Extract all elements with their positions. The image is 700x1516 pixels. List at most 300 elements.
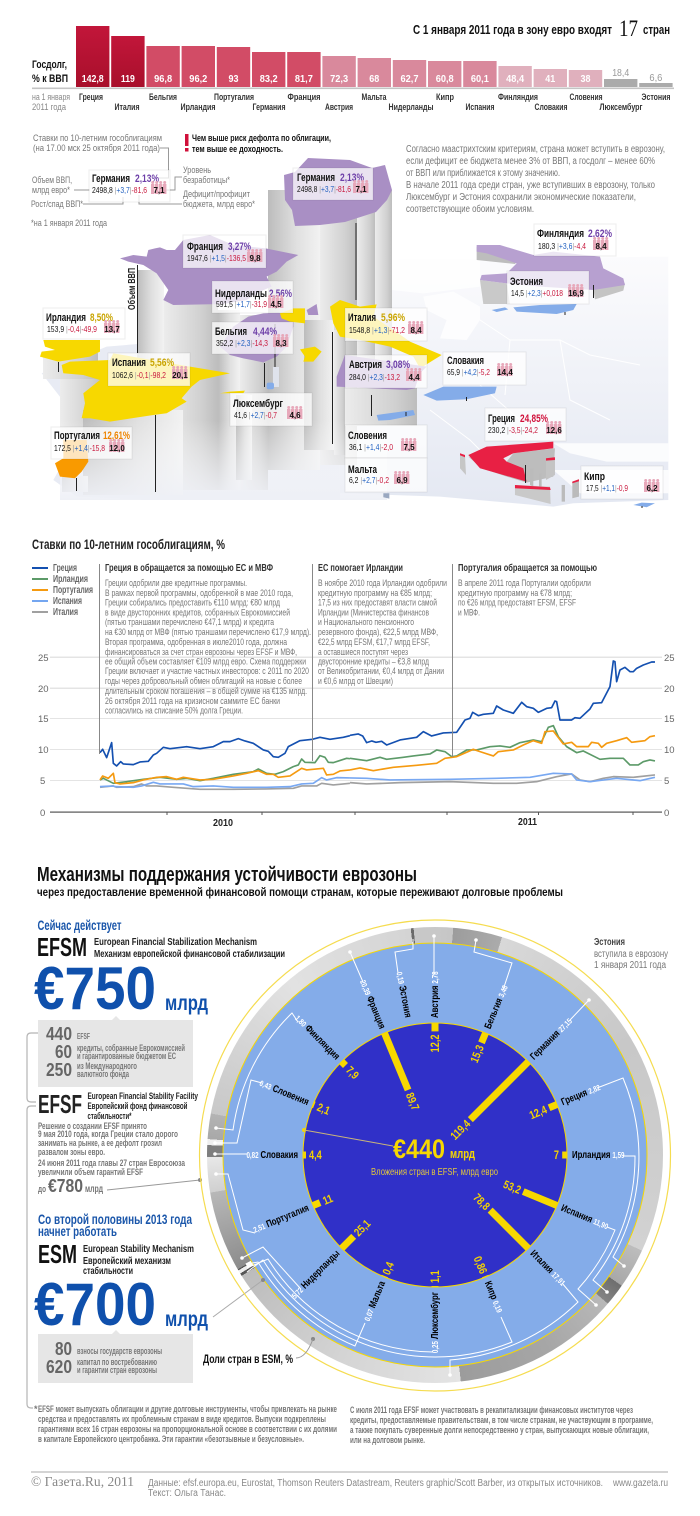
radial yellow bars: investments in EFSF: 7,9 xyxy=(343,1065,361,1082)
annotation: EU helps Ireland: двусторонние кредиты – €3,8 млрд xyxy=(318,656,430,666)
legend: how to read the labels: Рост/спад ВВП* xyxy=(31,199,83,209)
text block: Maastricht criteria: Люксембург и Эстония сохранили экономические показатели, xyxy=(406,191,636,203)
label: Slovenia: 7,5 xyxy=(403,443,415,452)
label: Cyprus: 6,2 xyxy=(646,484,658,493)
block: EFSF: увеличили объем гарантий EFSF xyxy=(38,1167,143,1177)
bar chart: government debt: 83,2 xyxy=(260,73,278,85)
label: Slovenia: 36,1 |+1,4|-2,0 xyxy=(349,442,393,452)
bar chart: government debt: 6,6 xyxy=(649,72,663,84)
radial yellow bars: investments in EFSF: 89,7 xyxy=(403,1091,421,1113)
legend: how to read the labels: Германия xyxy=(92,173,130,185)
radial yellow bars: investments in EFSF: 15,3 xyxy=(469,1044,487,1065)
label: Spain: 5,56% xyxy=(150,357,174,369)
label: Netherlands xyxy=(212,281,293,313)
center total: €440 billion: Вложения стран в EFSF, млрд евро xyxy=(371,1166,498,1178)
line chart: 10-year bond yields: 15 xyxy=(38,714,49,725)
legend: yield chart: Ирландия xyxy=(53,574,88,585)
block: EFSM: млрд xyxy=(165,992,208,1015)
label: Spain: Испания xyxy=(112,357,146,369)
bar chart: government debt: 60,1 xyxy=(471,73,489,85)
block: ESM: €700 xyxy=(34,1271,156,1338)
legend: yield chart: Италия xyxy=(53,607,78,618)
country labels around the inner circle: 0,82 Словакия xyxy=(246,1149,298,1160)
label: Slovakia: 14,4 xyxy=(497,368,513,377)
label: Malta: 6,9 xyxy=(396,476,408,485)
title: eurozone 17 countries xyxy=(413,16,670,41)
bar chart: government debt: 62,7 xyxy=(400,73,419,85)
radial yellow bars: investments in EFSF: 78,8 xyxy=(470,1192,492,1213)
label: Slovenia xyxy=(345,425,427,458)
legend: how to read the labels: безработицы* xyxy=(183,175,230,185)
bar chart: government debt: 142,8 xyxy=(82,73,104,85)
bar chart: government debt: 60,8 xyxy=(436,73,454,85)
label: Netherlands: 2,56% xyxy=(269,288,292,300)
block: EFSM: и гарантированные бюджетом ЕС xyxy=(77,1051,176,1061)
callout: default risk note: Чем выше риск дефолта по облигации, xyxy=(192,133,331,144)
bar chart: government debt: 18,4 xyxy=(612,67,629,79)
label: Belgium: 352,2 |+2,3|-14,3 xyxy=(216,338,268,348)
bar chart: government debt: Нидерланды xyxy=(388,102,434,112)
annotation: Portugal asks for help: кредитную программу на €78 млрд; xyxy=(458,588,572,598)
footnote: EFSF right xyxy=(350,1405,653,1445)
annotation: Greece asks for help: ее общий объем составляет €109 млрд евро. Схема поддержки xyxy=(105,656,306,666)
line chart: 10-year bond yields: 2011 xyxy=(518,816,537,828)
block: ESM xyxy=(34,1211,263,1383)
legend: yield chart xyxy=(32,563,93,618)
block: EFSF: развалом зоны евро. xyxy=(38,1147,105,1157)
annotation: EU helps Ireland: резервного фонда), €22,5 млрд МВФ, xyxy=(318,627,438,637)
bar chart: government debt: 93 xyxy=(228,73,239,85)
label: Austria xyxy=(345,355,427,388)
label: Greece: 230,2 |-3,5|-24,2 xyxy=(488,425,538,435)
radial yellow bars: investments in EFSF: 11 xyxy=(321,1193,335,1208)
bar chart: government debt: Финляндия xyxy=(498,92,538,102)
label: Germany: Германия xyxy=(297,172,335,184)
note: Estonia: Эстония xyxy=(594,937,625,948)
country labels around the inner circle: 20,39 Франция xyxy=(358,978,388,1030)
label: Luxembourg xyxy=(230,393,312,426)
block: ESM: и гарантии стран еврозоны xyxy=(77,1365,157,1375)
block: EFSF: 9 мая 2010 года, когда Греции стало дорого xyxy=(38,1129,178,1139)
radial yellow bars: investments in EFSF: 25,1 xyxy=(352,1218,374,1239)
label: Cyprus: Кипр xyxy=(584,471,605,483)
bracket lines xyxy=(27,1033,38,1408)
note: Estonia xyxy=(594,937,668,971)
country labels around the inner circle: 0,25 Люксембург xyxy=(429,1292,440,1353)
annotation: Greece asks for help: Греции включает и участие частных инвесторов: с 2011 по 2020 xyxy=(105,666,309,676)
label: Italy: 5,96% xyxy=(381,312,405,324)
label: Portugal: Португалия xyxy=(54,430,100,442)
text block: Maastricht criteria: соответствующие обоим условиям. xyxy=(406,203,534,215)
country labels around the inner circle: 1,80 Финляндия xyxy=(293,1012,342,1062)
line chart: 10-year bond yields: 25 xyxy=(38,653,49,664)
annotation: Portugal asks for help: и МВФ. xyxy=(458,608,480,618)
bar chart: government debt xyxy=(32,26,674,112)
label: Germany: 7,1 xyxy=(355,185,367,194)
country labels around the inner circle: Испания 11,90 xyxy=(560,1202,610,1231)
footnote: EFSF left xyxy=(34,1404,337,1444)
annotation: Greece asks for help: Греции собирались предоставить €110 млрд: €80 млрд xyxy=(105,598,281,608)
block: EFSM: 250 xyxy=(46,1060,72,1080)
label: Italy xyxy=(345,308,427,341)
annotation: Greece asks for help: финансироваться за счет стран еврозоны через EFSF и МВФ, xyxy=(105,647,297,657)
label: France: 3,27% xyxy=(228,241,251,253)
radial yellow bars: investments in EFSF: 2,1 xyxy=(315,1102,331,1118)
label: Italy: 8,4 xyxy=(410,326,422,335)
axis title: GDP volume: Объем ВВП xyxy=(126,268,138,310)
label: Portugal: 172,5 |+1,4|-15,8 xyxy=(54,443,105,453)
block: ESM: ESM xyxy=(38,1239,77,1269)
country labels around the inner circle xyxy=(246,971,625,1353)
block: ESM: Со второй половины 2013 года xyxy=(38,1211,192,1227)
bar chart: government debt: на 1 января xyxy=(32,92,70,102)
bar chart: government debt: Кипр xyxy=(436,92,454,102)
label: Germany: 2498,8 |+3,7|-81,6 xyxy=(297,184,351,194)
legend: how to read the labels: Уровень xyxy=(183,165,211,175)
radial yellow bars: investments in EFSF: 1,1 xyxy=(430,1270,442,1283)
bar chart: government debt: Италия xyxy=(114,102,140,112)
title: eurozone 17 countries: С 1 января 2011 года в зону евро входят xyxy=(413,22,612,37)
line chart: 10-year bond yields: 0 xyxy=(664,808,669,819)
legend: how to read the labels: 2498,8 |+3,7|-81,6 xyxy=(92,185,147,195)
annotation: Greece asks for help: годы через добровольный обмен облигаций на новые с более xyxy=(105,676,302,686)
label: France: 1947,6 |+1,5|-136,5 xyxy=(187,253,246,263)
block: EFSF: 24 июня 2011 года главы 27 стран Евросоюза xyxy=(38,1158,186,1168)
legend: how to read the labels: Объем ВВП, xyxy=(32,175,72,185)
label: Slovakia: 65,9 |+4,2|-5,2 xyxy=(447,367,490,377)
annotation: Greece asks for help: Греции одобрили две кредитные программы. xyxy=(105,578,247,588)
legend: how to read the labels xyxy=(31,133,255,228)
bar chart: government debt: 2011 года xyxy=(32,102,66,112)
annotation: EU helps Ireland: ЕС помогает Ирландии xyxy=(318,563,403,574)
line chart: 10-year bond yields: 5 xyxy=(664,776,669,787)
label: Finland: 8,4 xyxy=(595,242,607,251)
heading: stability mechanisms: через предоставление временной финансовой помощи странам, которые переживают долговые проблемы xyxy=(37,885,563,899)
annotation: EU helps Ireland: 17,5 из них предоставят власти самой xyxy=(318,598,437,608)
radial yellow bars: investments in EFSF: 53,2 xyxy=(501,1179,522,1197)
footer xyxy=(31,1472,668,1499)
country labels around the inner circle: Греция 2,82 xyxy=(559,1081,602,1107)
label: Italy: 1548,8 |+1,3|-71,2 xyxy=(349,325,405,335)
bar chart: government debt: Словакия xyxy=(534,102,568,112)
line chart: 10-year bond yields: 0 xyxy=(40,808,45,819)
bar chart: government debt: 81,7 xyxy=(295,73,313,85)
annotation: EU helps Ireland xyxy=(318,563,447,686)
bar chart: government debt: 96,8 xyxy=(154,73,172,85)
footer: Текст: Ольга Танас. xyxy=(148,1488,226,1499)
radial yellow bars: investments in EFSF: 12,4 xyxy=(528,1104,549,1122)
block: EFSF: стабильности* xyxy=(88,1111,132,1122)
footnote: EFSF left: гарантиями всех 16 стран еврозоны на пропорциональной основе в соответствии с их долями xyxy=(38,1424,337,1434)
line chart: 10-year bond yields: 15 xyxy=(664,714,675,725)
label: Slovakia: Словакия xyxy=(447,355,484,367)
heading: stability mechanisms xyxy=(37,864,563,899)
annotation: Greece asks for help: Вторая программа, одобренная в июле2010 года, должна xyxy=(105,637,287,647)
annotation: Greece asks for help: В рамках первой программы, одобренной в мае 2010 года, xyxy=(105,588,293,598)
footnote: EFSF left: * xyxy=(34,1404,38,1414)
annotation: EU helps Ireland: и Национального пенсионного xyxy=(318,617,414,627)
country labels around the inner circle: Италия 17,91 xyxy=(528,1248,568,1288)
label: France xyxy=(183,235,266,268)
annotation: Greece asks for help xyxy=(105,562,311,716)
line chart: 10-year bond yields: 20 xyxy=(664,684,675,695)
block: EFSM: EFSF xyxy=(77,1032,90,1041)
legend: how to read the labels: 2,13% xyxy=(135,173,159,185)
label: Ireland: Ирландия xyxy=(46,312,86,324)
label: Slovakia xyxy=(443,352,526,385)
label: Cyprus xyxy=(581,466,663,499)
label: Estonia: Эстония xyxy=(510,276,543,288)
annotation: Greece asks for help: (пятью траншами перечислено €47,1 млрд) и кредита xyxy=(105,617,274,627)
bar chart: government debt: Словения xyxy=(570,92,602,102)
block: EFSF: €780 xyxy=(48,1176,83,1196)
label: Estonia: 14,5 |+2,3|+0,018 xyxy=(511,288,563,298)
countries on the map xyxy=(40,158,655,507)
country labels around the inner circle: Ирландия 1,59 xyxy=(572,1149,625,1160)
chart: circular diagram xyxy=(200,920,670,1391)
country labels around the inner circle: 0,19 Эстония xyxy=(394,971,414,1019)
footnote: EFSF right: или на долговом рынке. xyxy=(350,1435,425,1445)
annotation: Greece asks for help: Греция в обращается за помощью ЕС и МВФ xyxy=(105,562,273,574)
callout: default risk note xyxy=(185,133,331,155)
block: EFSM xyxy=(34,917,285,1087)
block: EFSM: кредиты, собранные Еврокомиссией xyxy=(77,1043,185,1053)
footnote: EFSF left: EFSF может выпускать облигации и другие долговые инструменты, чтобы привлекать на рынке xyxy=(38,1404,337,1414)
block: EFSF: до xyxy=(38,1184,46,1194)
bar chart: government debt: 41 xyxy=(545,73,555,85)
label: Belgium: 8,3 xyxy=(275,339,287,348)
bar chart: government debt: Германия xyxy=(252,102,286,112)
annotation: EU helps Ireland: Ирландии (Министерства финансов xyxy=(318,608,429,618)
label: Spain: 20,1 xyxy=(172,371,188,380)
block: EFSF: Решение о создании EFSF принято xyxy=(38,1121,147,1131)
legend: how to read the labels: бюджета, млрд евро* xyxy=(183,199,255,209)
title: eurozone 17 countries: стран xyxy=(643,22,670,37)
block: EFSM: Механизм европейской финансовой стабилизации xyxy=(94,948,285,960)
bar chart: government debt: 72,3 xyxy=(330,73,348,85)
block: EFSM: 440 xyxy=(46,1024,72,1044)
annotation: Greece asks for help: согласились на списание 50% долга Греции. xyxy=(105,706,243,716)
annotation: Portugal asks for help: по €26 млрд предоставят EFSM, EFSF xyxy=(458,598,576,608)
label: Ireland xyxy=(43,308,125,339)
line chart: 10-year bond yields: 10 xyxy=(38,745,49,756)
radial yellow bars: investments in EFSF: 7 xyxy=(554,1150,559,1162)
text block: Maastricht criteria xyxy=(406,144,665,215)
country labels around the inner circle: 0,43 Словения xyxy=(258,1077,311,1107)
label: Luxembourg: 4,6 xyxy=(289,411,301,420)
block: EFSF: EFSF xyxy=(38,1089,82,1119)
bar chart: government debt: Эстония xyxy=(642,92,670,102)
label: Italy: Италия xyxy=(348,312,376,324)
label: Ireland: 8,50% xyxy=(90,312,113,324)
bar chart: government debt: Мальта xyxy=(362,92,387,102)
label: Netherlands: Нидерланды xyxy=(215,288,267,300)
callout: shares in ESM: Доли стран в ESM, % xyxy=(203,1354,293,1366)
line chart: 10-year bond yields: 20 xyxy=(38,684,49,695)
label: Greece: 12,6 xyxy=(546,426,562,435)
radial yellow bars: investments in EFSF xyxy=(303,1023,567,1287)
label: Estonia xyxy=(507,271,589,304)
block: EFSM: European Financial Stabilization Mechanism xyxy=(94,937,257,948)
blue ring: investments labels xyxy=(213,934,647,1377)
country labels around the inner circle: Кипр 0,19 xyxy=(483,1279,506,1314)
text block: Maastricht criteria: от ВВП или приближается к этому значению. xyxy=(406,167,560,179)
annotation: EU helps Ireland: от Великобритании, €0,4 млрд от Дании xyxy=(318,666,444,676)
annotation: Portugal asks for help: В апреле 2011 года Португалии одобрили xyxy=(458,578,591,588)
label: Portugal: 12,61% xyxy=(103,430,130,442)
block: ESM: начнет работать xyxy=(38,1223,117,1239)
heading: bond yields: Ставки по 10-летним гособлигациям, % xyxy=(32,536,225,552)
annotation: Greece asks for help: 26 октября 2011 года на кризисном саммите ЕС банки xyxy=(105,696,280,706)
annotation: Portugal asks for help: Португалия обращается за помощью xyxy=(458,562,597,574)
country labels around the inner circle: Германия 27,15 xyxy=(528,1015,574,1062)
annotation: Portugal asks for help xyxy=(458,562,597,618)
line chart: 10-year bond yields: 2010 xyxy=(213,817,233,829)
label: Austria: 3,08% xyxy=(386,359,410,371)
footer: Данные: efsf.europa.eu, Eurostat, Thomson Reuters Datastream, Reuters graphic/Scott Barber, из открытых источников. xyxy=(148,1478,603,1489)
line chart: 10-year bond yields: 25 xyxy=(664,653,675,664)
annotation: EU helps Ireland: и €0,6 млрд от Швеции) xyxy=(318,676,393,686)
bar chart: government debt: 48,4 xyxy=(506,73,524,85)
label: Belgium xyxy=(212,322,293,354)
country labels around the inner circle: Австрия 2,78 xyxy=(429,971,440,1018)
label: Greece: Греция xyxy=(488,413,515,425)
bar chart: government debt: Австрия xyxy=(325,102,353,112)
label: Finland: 2,62% xyxy=(588,228,612,240)
label: Ireland: 153,9 |-0,4|-49,9 xyxy=(47,324,97,334)
legend: how to read the labels: 7,1 xyxy=(153,186,165,195)
radial yellow bars: investments in EFSF: 0,86 xyxy=(470,1255,489,1276)
label: Estonia: 16,9 xyxy=(568,289,584,298)
label: Belgium: Бельгия xyxy=(215,326,247,338)
label: Belgium: 4,44% xyxy=(253,326,277,338)
footnote: EFSF left: в капитале Европейского центробанка. Эти гарантии «безотзывные и безусловные». xyxy=(38,1434,304,1444)
block: EFSM: валютного фонда xyxy=(77,1069,130,1079)
bar chart: government debt: 119 xyxy=(121,73,135,85)
footer: www.gazeta.ru xyxy=(612,1478,668,1489)
block: EFSF: занимать на рынке, а ее дефолт грозил xyxy=(38,1138,162,1148)
label: Austria: Австрия xyxy=(349,359,382,371)
label: Slovenia: Словения xyxy=(348,430,387,442)
title: eurozone 17 countries: 17 xyxy=(619,16,638,41)
annotation: EU helps Ireland: а оставшиеся поступят через xyxy=(318,647,408,657)
legend: how to read the labels: Дефицит/профицит xyxy=(183,189,250,199)
legend: how to read the labels: *на 1 января 2011 года xyxy=(31,218,107,228)
label: Austria: 284,0 |+2,3|-13,2 xyxy=(349,372,400,382)
country labels around the inner circle: Бельгия 3,48 xyxy=(482,983,510,1030)
block: EFSM: из Международного xyxy=(77,1061,137,1071)
label: Finland: 180,3 |+3,6|-4,4 xyxy=(538,241,586,251)
center total: €440 billion: млрд xyxy=(450,1146,476,1161)
bar chart: government debt: Ирландия xyxy=(180,102,216,112)
legend: how to read the labels: Ставки по 10-летним гособлигациям xyxy=(33,133,162,143)
country labels around the inner circle: 0,07 Мальта xyxy=(361,1278,388,1323)
block: ESM: European Stability Mechanism xyxy=(83,1244,194,1255)
label: Finland xyxy=(534,224,616,256)
line chart: 10-year bond yields: 5 xyxy=(40,776,45,787)
block: EFSF: Европейский фонд финансовой xyxy=(88,1101,188,1112)
label: Greece: 24,85% xyxy=(520,413,548,425)
label: Finland: Финляндия xyxy=(537,228,584,240)
label: Malta: Мальта xyxy=(348,464,378,476)
label: Cyprus: 17,5 |+1,1|-0,9 xyxy=(586,483,628,493)
radial yellow bars: investments in EFSF: 4,4 xyxy=(309,1150,322,1162)
label: Malta xyxy=(345,458,427,492)
line chart: 10-year bond yields xyxy=(38,564,675,829)
callout: default risk note: тем выше ее доходность. xyxy=(192,144,283,155)
label: Germany: 2,13% xyxy=(340,172,364,184)
block: ESM: взносы государств еврозоны xyxy=(77,1346,162,1356)
label: Portugal xyxy=(51,427,132,459)
bar chart: government debt: Греция xyxy=(79,92,103,102)
block: EFSF: млрд xyxy=(85,1184,103,1195)
block: ESM: Европейский механизм xyxy=(83,1256,171,1267)
label: France: 9,8 xyxy=(249,254,261,263)
block: ESM: 620 xyxy=(46,1357,72,1377)
block: EFSM: €750 xyxy=(34,955,156,1022)
label: Spain xyxy=(108,353,190,386)
label: Germany xyxy=(293,168,373,200)
label: France: Франция xyxy=(187,241,223,253)
legend: yield chart: Португалия xyxy=(53,585,93,596)
axis lines on the map xyxy=(58,223,642,508)
label: Malta: 6,2 |+2,7|-0,2 xyxy=(349,475,389,485)
center total: €440 billion: €440 xyxy=(393,1134,445,1164)
callout: shares in ESM xyxy=(203,1339,313,1366)
annotation: EU helps Ireland: кредитную программу на €85 млрд; xyxy=(318,588,432,598)
legend: how to read the labels: млрд евро* xyxy=(32,185,70,195)
label: Netherlands: 591,5 |+1,7|-31,9 xyxy=(216,299,267,309)
radial yellow bars: investments in EFSF: 12,2 xyxy=(430,1034,442,1052)
block: ESM: капитал по востребованию xyxy=(77,1357,157,1367)
radial yellow bars: investments in EFSF: 119,4 xyxy=(449,1118,474,1143)
block: EFSM: 60 xyxy=(55,1042,72,1062)
annotation: Greece asks for help: на €30 млрд от МВФ (пятью траншами перечислено €17,9 млрд). xyxy=(105,627,311,637)
block: EFSF xyxy=(38,1089,202,1196)
label: Ireland: 13,7 xyxy=(104,325,120,334)
block: ESM: стабильности xyxy=(83,1265,133,1277)
ring: country shares in ESM xyxy=(207,927,663,1383)
footnote: EFSF left: средства и предоставлять их проблемным странам в виде кредитов. Выпуски подкреплены xyxy=(38,1414,326,1424)
bar chart: government debt: % к ВВП xyxy=(32,73,68,85)
country labels around the inner circle: 2,51 Португалия xyxy=(251,1202,310,1235)
bar chart: government debt: Испания xyxy=(466,102,494,112)
center total: €440 billion xyxy=(302,1128,498,1178)
annotation: Greece asks for help: длительным сроком погашения – в общей сумме на €135 млрд. xyxy=(105,686,307,696)
legend: yield chart: Испания xyxy=(53,596,82,607)
label: Netherlands: 4,5 xyxy=(270,300,282,309)
line chart: 10-year bond yields: 10 xyxy=(664,745,675,756)
note: Estonia: вступила в еврозону xyxy=(594,949,668,960)
label: Luxembourg: 41,6 |+2,7|-0,7 xyxy=(234,410,277,420)
block: EFSM: EFSM xyxy=(37,932,87,962)
annotation: EU helps Ireland: €22,5 млрд EFSM, €17,7 млрд EFSF, xyxy=(318,637,430,647)
bar chart: government debt: 38 xyxy=(580,73,591,85)
footer: © Газета.Ru, 2011 xyxy=(31,1475,134,1490)
country labels around the inner circle: 5,72 Нидерланды xyxy=(289,1247,342,1301)
annotation: EU helps Ireland: В ноябре 2010 года Ирландии одобрили xyxy=(318,578,447,588)
heading: stability mechanisms: Механизмы поддержания устойчивости еврозоны xyxy=(37,864,417,886)
bar chart: government debt: Госдолг, xyxy=(32,59,67,71)
legend: yield chart: Греция xyxy=(53,563,77,574)
bar chart: government debt: Португалия xyxy=(214,92,254,102)
3D columns under countries xyxy=(43,190,417,500)
label: Portugal: 12,0 xyxy=(109,444,125,453)
block: ESM: 80 xyxy=(55,1339,72,1359)
label: Spain: 1062,6 |-0,1|-98,2 xyxy=(112,370,166,380)
bar chart: government debt: Франция xyxy=(288,92,320,102)
label: Luxembourg: Люксембург xyxy=(233,398,283,410)
